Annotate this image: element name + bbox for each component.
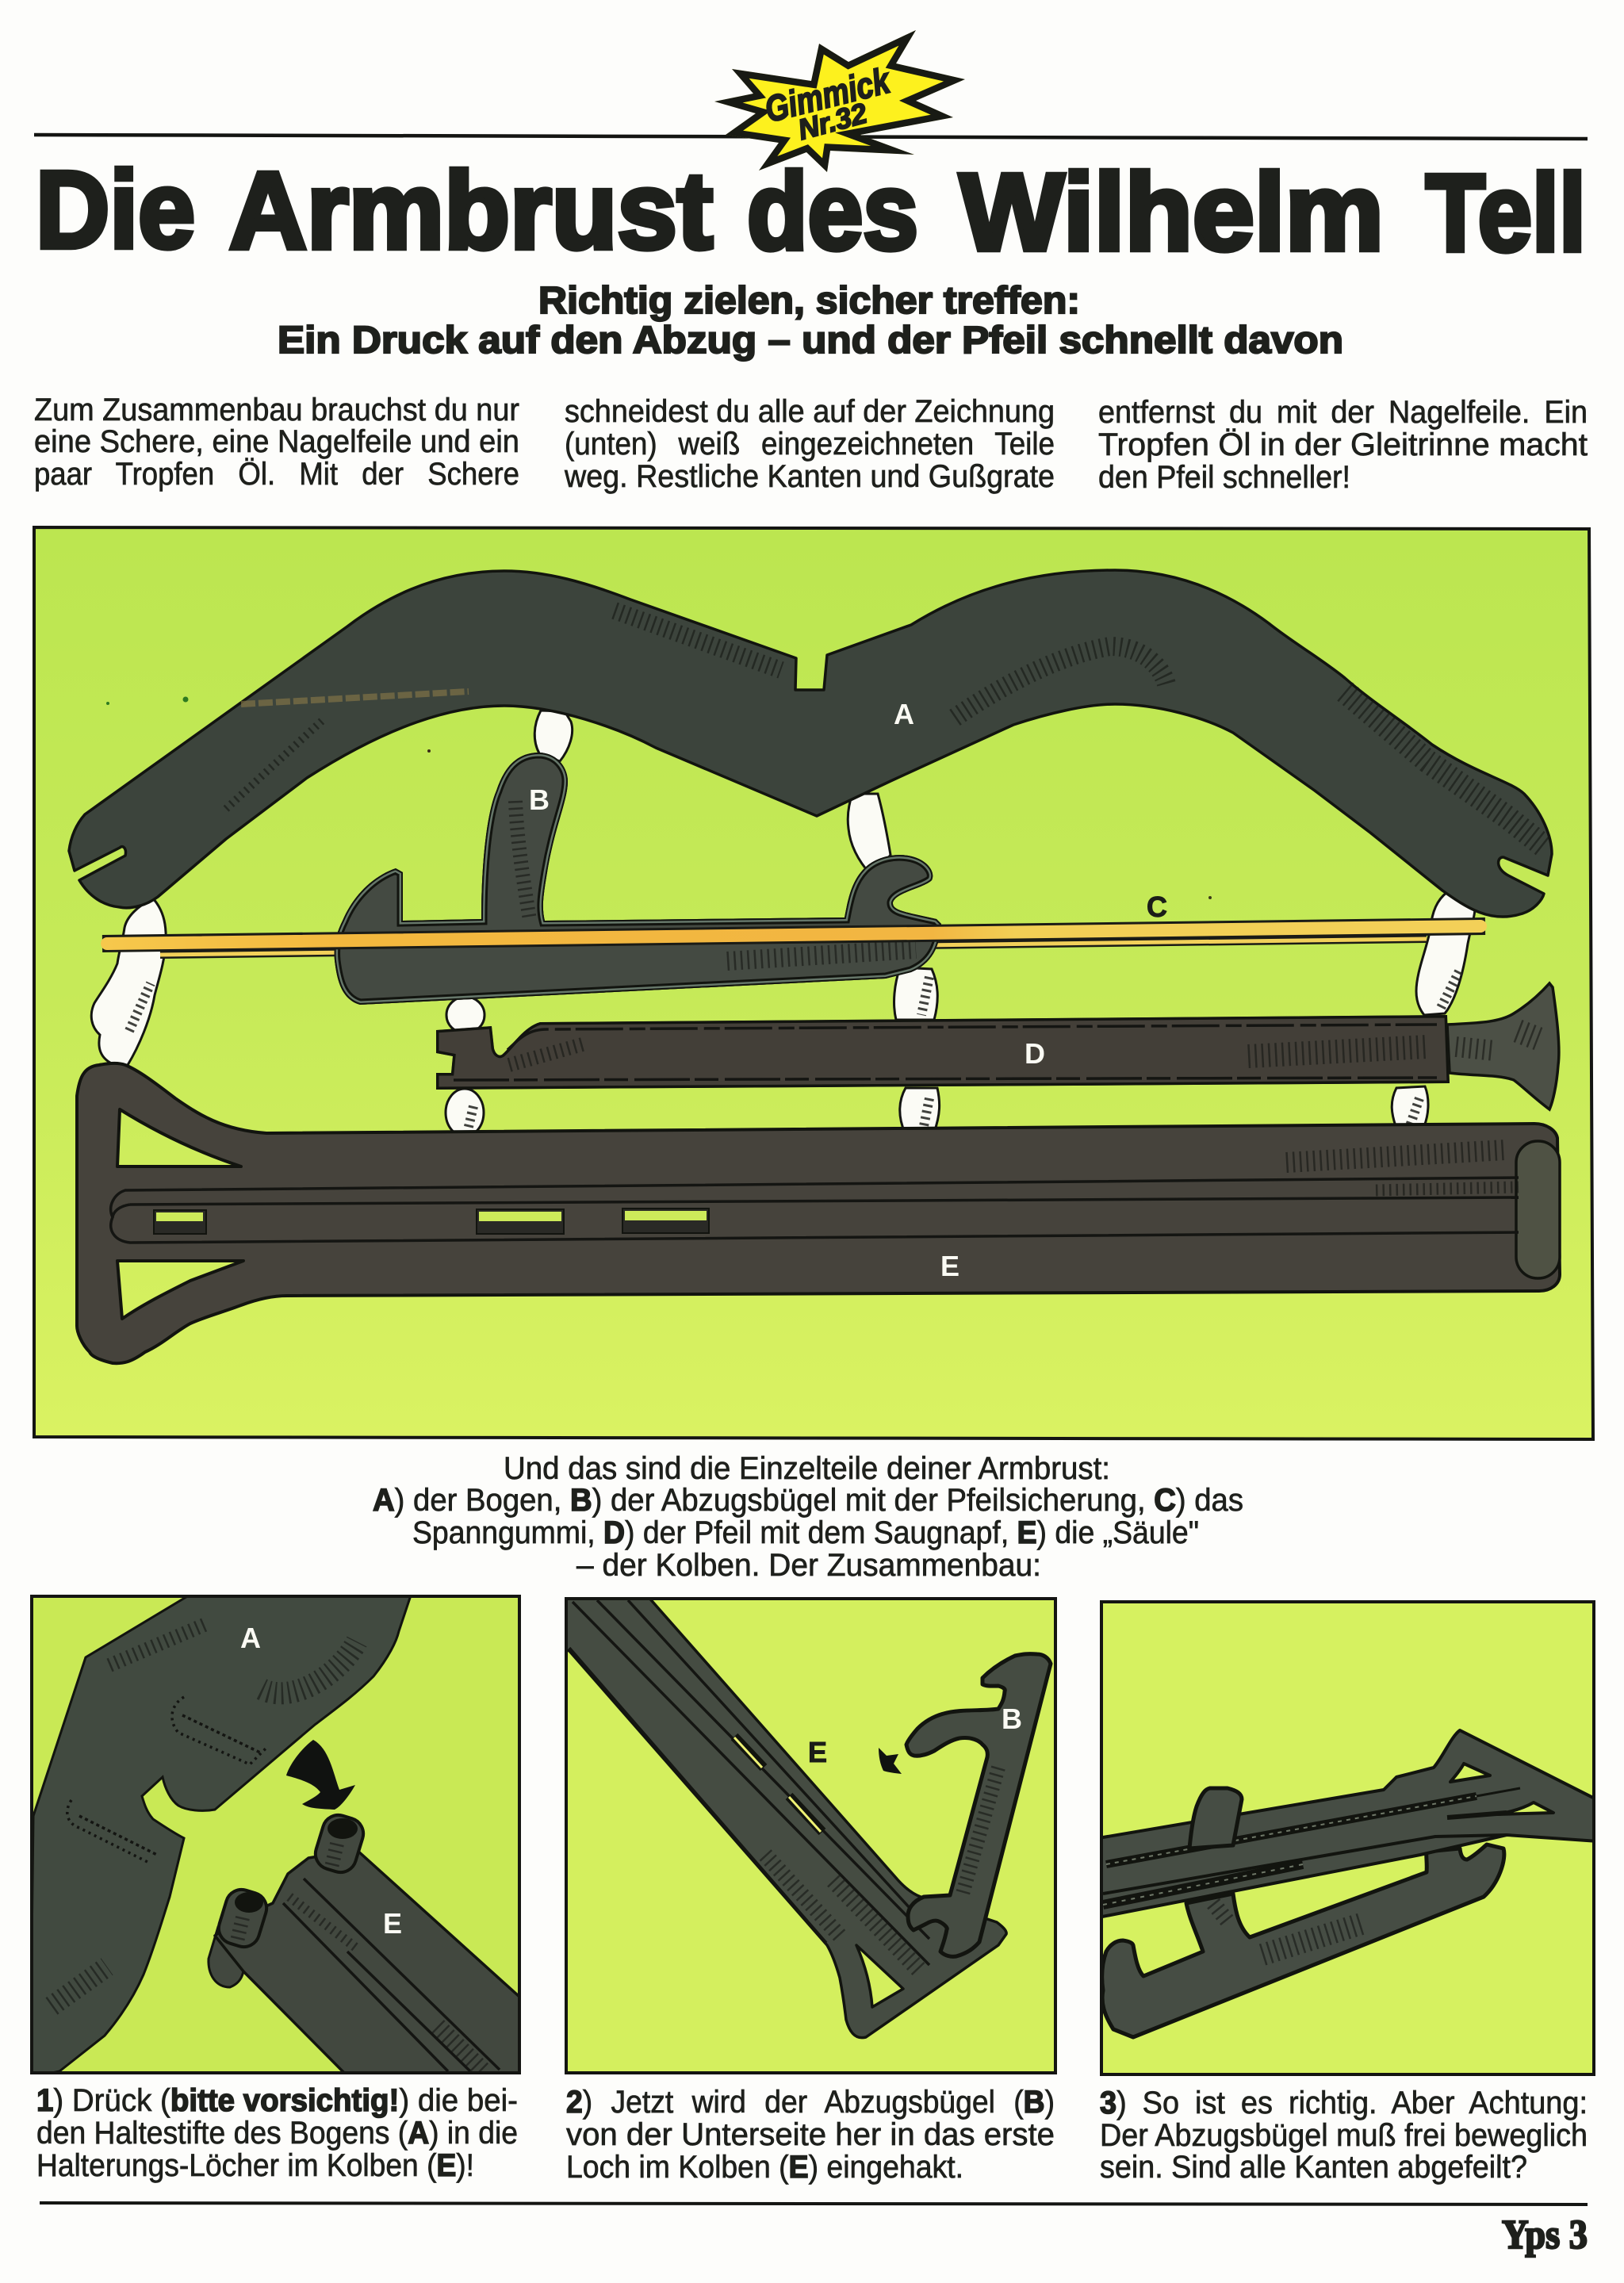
arrow shaft xyxy=(436,1015,1450,1090)
badge text: Gimmick: Gimmick xyxy=(760,59,895,130)
footer rule xyxy=(40,2203,1588,2204)
step 2 caption xyxy=(566,2085,1055,2185)
arrow hatching xyxy=(509,1044,585,1065)
step 1 arrow xyxy=(286,1740,355,1810)
label B: B xyxy=(529,783,550,816)
step 1 stock E xyxy=(209,1811,522,2076)
label B: B xyxy=(1002,1703,1022,1735)
step 1 background xyxy=(32,1596,519,2073)
step 3 trigger top xyxy=(1189,1788,1242,1848)
step 2 frame xyxy=(566,1599,1055,2073)
white cut-away sprues xyxy=(91,711,1475,1136)
step 3 caption: 3) So ist es richtig. Aber Achtung: xyxy=(1100,2086,1588,2120)
rail grooves xyxy=(1106,1796,1477,1864)
subtitle xyxy=(278,280,1343,362)
stock slots xyxy=(154,1209,709,1234)
step 2 caption: Loch im Kolben (E) eingehakt. xyxy=(566,2150,963,2185)
parts list caption: A) der Bogen, B) der Abzugsbügel mit der Pfeilsicherung, C) das xyxy=(373,1483,1243,1518)
starburst shape xyxy=(714,30,965,172)
step 3 caption: sein. Sind alle Kanten abgefeilt? xyxy=(1100,2150,1527,2185)
subtitle: Richtig zielen, sicher treffen: xyxy=(538,280,1080,322)
specks xyxy=(106,696,189,705)
stock slots xyxy=(734,1737,764,1768)
rubber band lower strand xyxy=(160,939,1427,955)
part C: rubber band xyxy=(102,891,1485,944)
panel: step 2 xyxy=(565,1595,1055,2073)
stock end cap xyxy=(1516,1141,1560,1278)
title xyxy=(36,149,1586,274)
label C: C xyxy=(1147,891,1167,923)
green background xyxy=(34,527,1593,1439)
starburst badge: Gimmick Nr. 32 xyxy=(714,30,965,172)
label D: D xyxy=(1025,1037,1045,1070)
part A: bow xyxy=(69,570,1552,917)
step 1 frame xyxy=(32,1596,519,2073)
intro text column 2: (unten) weiß eingezeichneten Teile xyxy=(565,427,1055,462)
label E: E xyxy=(808,1736,827,1768)
intro text column 1: eine Schere, eine Nagelfeile und ein xyxy=(34,424,519,459)
stock hatching xyxy=(1286,1150,1506,1163)
label E: E xyxy=(940,1250,959,1282)
intro text column 2: weg. Restliche Kanten und Gußgrate xyxy=(564,459,1055,494)
step 3 caption: Der Abzugsbügel muß frei beweglich xyxy=(1100,2118,1588,2153)
step 1 caption xyxy=(36,2083,518,2183)
step 3 caption xyxy=(1100,2086,1588,2185)
intro text column 2: schneidest du alle auf der Zeichnung xyxy=(565,394,1055,429)
trigger hatching xyxy=(515,801,530,920)
intro text column 3: den Pfeil schneller! xyxy=(1098,460,1350,495)
step 1 caption: den Haltestifte des Bogens (A) in die xyxy=(36,2116,518,2151)
page number: Yps 3 xyxy=(1502,2212,1588,2258)
intro text column 3 xyxy=(1098,395,1588,495)
step 2 caption: von der Unterseite her in das erste xyxy=(566,2117,1055,2152)
intro text column 3: entfernst du mit der Nagelfeile. Ein xyxy=(1098,395,1588,430)
step 2 trigger guard B xyxy=(906,1654,1051,1956)
title: des xyxy=(747,151,918,273)
part B: trigger guard xyxy=(335,753,941,1005)
panel: step 1 xyxy=(30,1595,522,2078)
parts list caption: – der Kolben. Der Zusammenbau: xyxy=(576,1548,1041,1583)
parts list caption: Spanngummi, D) der Pfeil mit dem Saugnapf, E) die „Säule" xyxy=(412,1515,1199,1550)
step 1 caption: 1) Drück (bitte vorsichtig!) die bei- xyxy=(36,2083,518,2118)
badge text: Nr. 32: Nr.32 xyxy=(795,97,871,146)
step 2 background xyxy=(566,1599,1055,2073)
step 2 stock E xyxy=(565,1595,1006,2038)
cylinder pin left xyxy=(217,1887,268,1949)
header rule xyxy=(34,135,1588,139)
step 3 background xyxy=(1101,1602,1594,2074)
title: Die xyxy=(36,149,195,271)
parts list caption: Und das sind die Einzelteile deiner Armbrust: xyxy=(504,1451,1110,1486)
parts list caption xyxy=(373,1451,1243,1583)
suction cup xyxy=(1447,983,1559,1109)
shaft inner lines xyxy=(508,1025,1437,1050)
title: Wilhelm xyxy=(959,151,1384,274)
step 2 caption: 2) Jetzt wird der Abzugsbügel (B) xyxy=(566,2085,1055,2120)
step 3 frame xyxy=(1101,1602,1594,2074)
title: Armbrust xyxy=(229,150,713,272)
panel: step 3 xyxy=(1098,1602,1598,2074)
step 1 bow A xyxy=(30,1595,411,2078)
panel: parts sheet xyxy=(34,527,1593,1439)
intro text column 3: Tropfen Öl in der Gleitrinne macht xyxy=(1098,427,1588,462)
intro text column 1: Zum Zusammenbau brauchst du nur xyxy=(34,393,519,427)
subtitle: Ein Druck auf den Abzug – und der Pfeil schnellt davon xyxy=(278,320,1343,362)
label A: A xyxy=(240,1622,261,1654)
intro text column 1 xyxy=(34,393,519,492)
step 1 caption: Halterungs-Löcher im Kolben (E)! xyxy=(36,2148,474,2183)
step 3 trigger guard B xyxy=(1102,1844,1504,2037)
sprue hatch marks xyxy=(129,971,1459,1130)
label A: A xyxy=(894,698,914,730)
cylinder pin right xyxy=(314,1813,365,1875)
step 3 stock E with rail xyxy=(1098,1730,1598,1917)
smudge on the bow xyxy=(241,691,469,704)
intro text column 1: paar Tropfen Öl. Mit der Schere xyxy=(34,457,519,492)
bow pin marks xyxy=(182,1715,260,1752)
part E: stock xyxy=(77,1063,1560,1363)
intro text column 2 xyxy=(564,394,1055,494)
bow hatching xyxy=(615,611,781,670)
label E: E xyxy=(383,1907,402,1940)
title: Tell xyxy=(1426,152,1586,274)
step 2 arrow xyxy=(879,1748,902,1774)
part D: arrow with suction cup xyxy=(436,983,1559,1109)
stock groove lines xyxy=(111,1178,1519,1243)
stock hatching xyxy=(765,1855,840,1936)
